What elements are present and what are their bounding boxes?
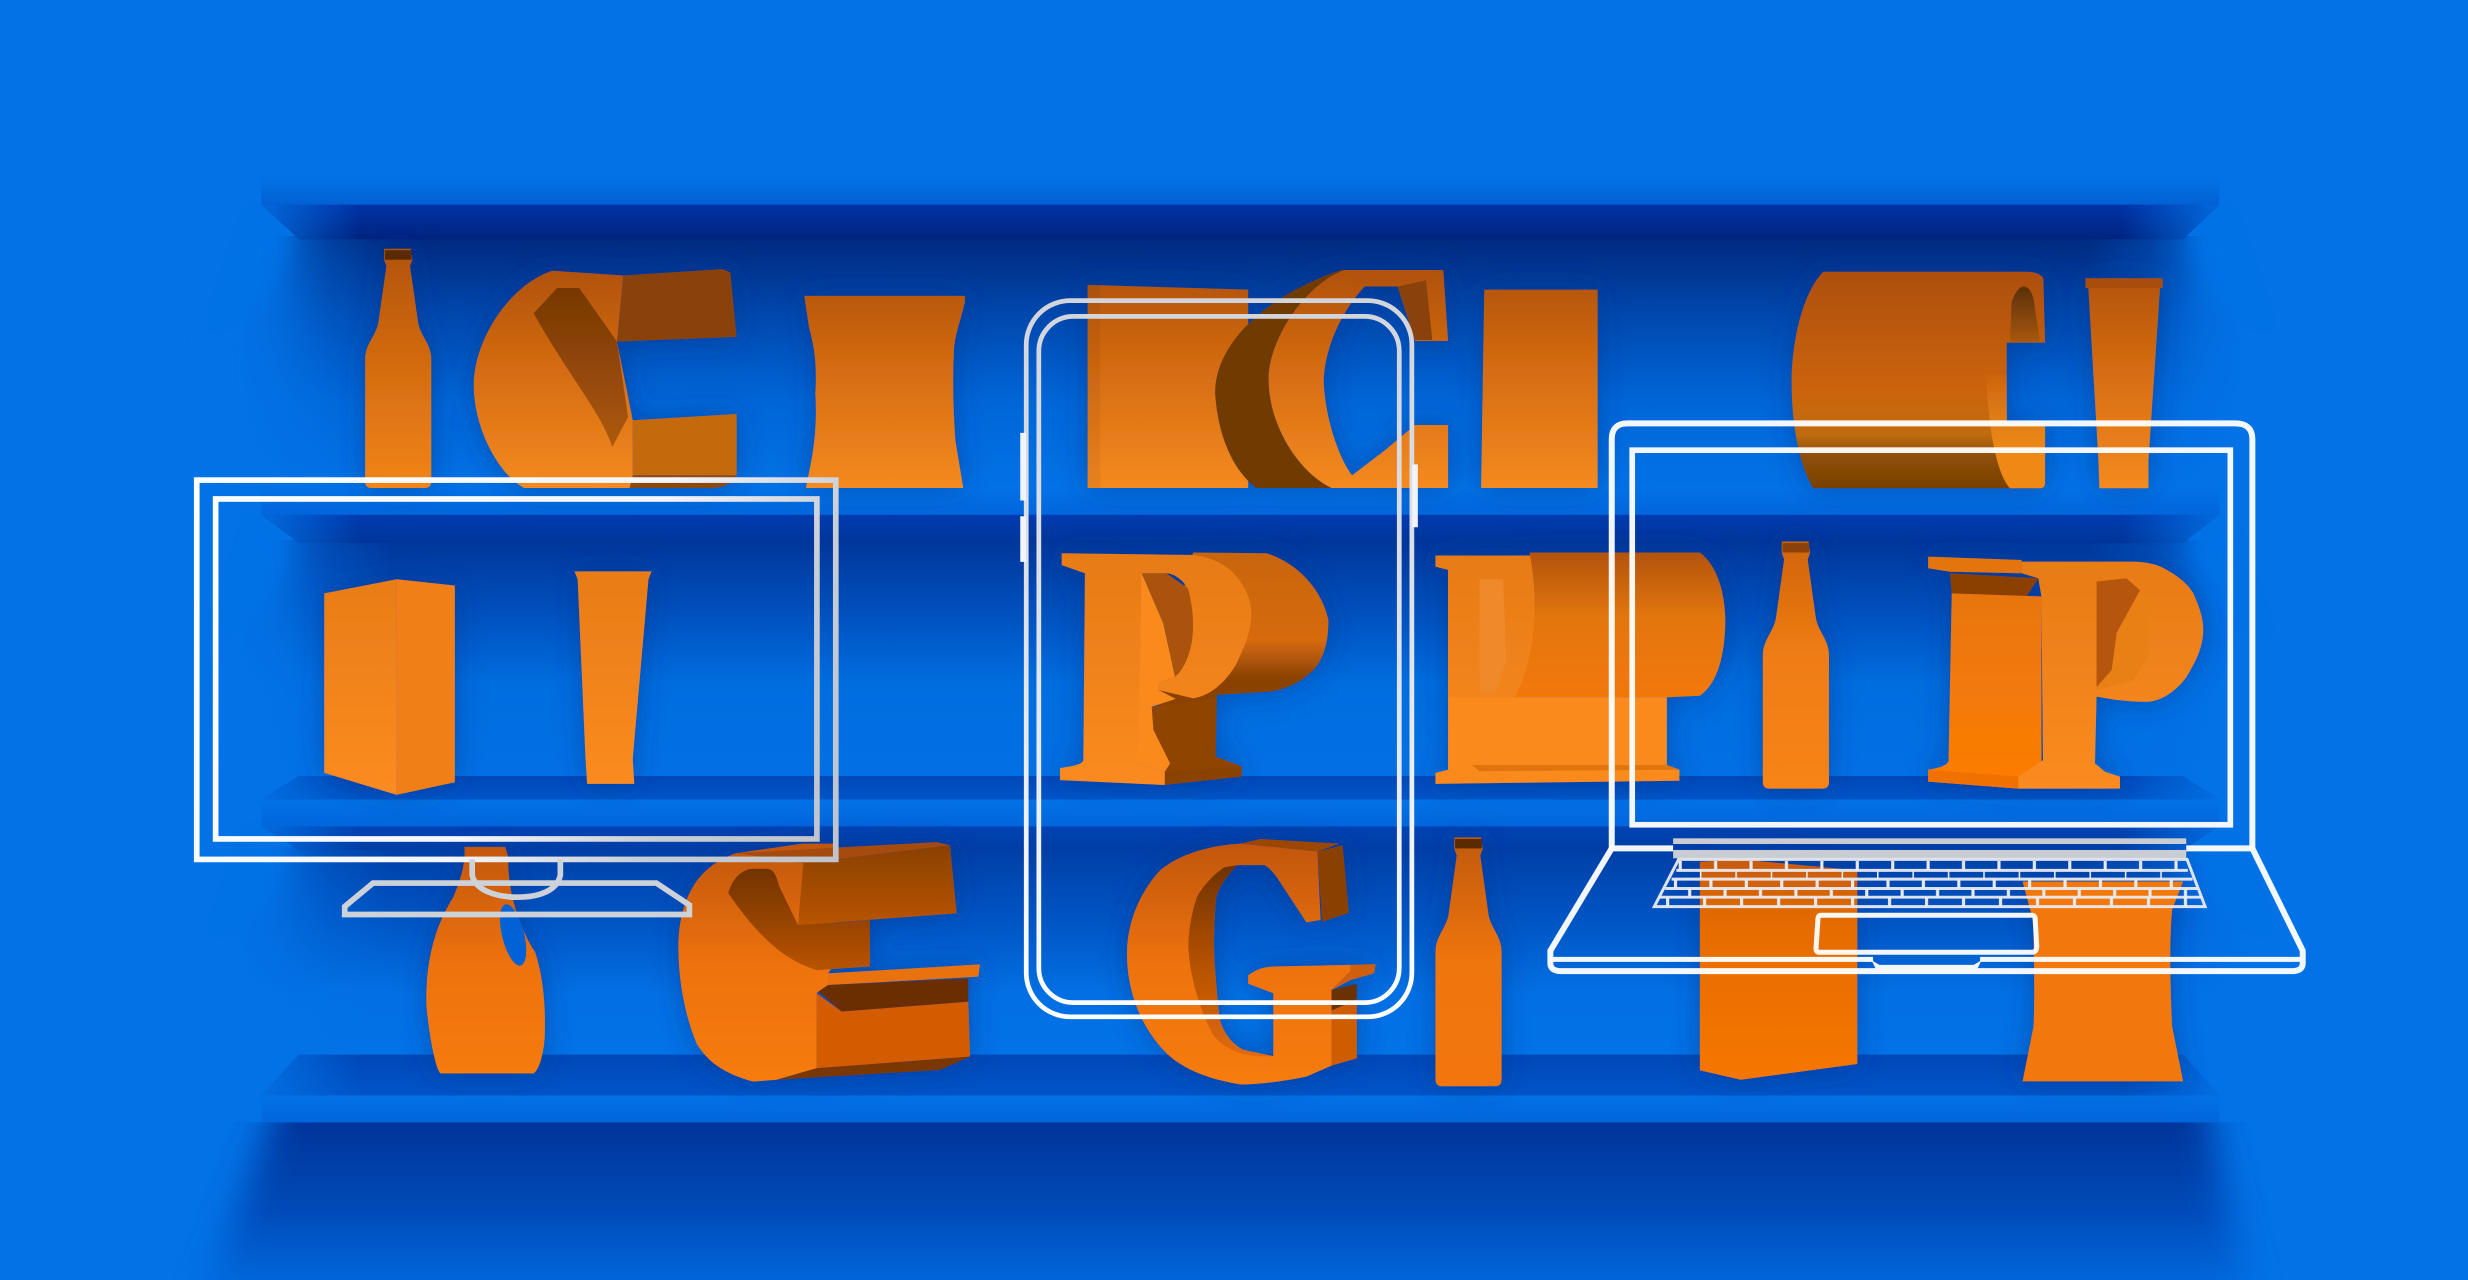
row 2 objects: [324, 541, 2203, 795]
phone body: [1026, 301, 1412, 1017]
phone buttons: [1023, 433, 1415, 562]
box 5: [1700, 859, 1857, 1080]
monitor stand: [345, 859, 689, 915]
snack pouch 2: [2023, 881, 2183, 1081]
letter C 1: [474, 269, 737, 488]
shelf 3 plank and surfaces: [261, 776, 2219, 850]
tube 1: [2085, 278, 2163, 488]
box 3: [1481, 290, 1598, 488]
laptop hinge: [1673, 838, 2186, 858]
letter P 1: [1060, 552, 1328, 785]
phone screen: [1039, 316, 1399, 1003]
shelf unit: [205, 176, 2276, 1280]
back wall: row 3: [236, 847, 2244, 1058]
bottle 1: [365, 249, 431, 488]
tube 2: [575, 571, 652, 784]
row 1 objects: [365, 249, 2163, 488]
letter C 2: [1215, 269, 1448, 488]
shelf 1 plank and underside: [261, 176, 2219, 239]
bottle 3: [1435, 837, 1502, 1086]
letter G: [1127, 839, 1376, 1084]
phone outline: [1023, 301, 1415, 1017]
back wall: row 2: [236, 540, 2244, 779]
monitor outline: [197, 480, 836, 915]
laptop screen: [1632, 450, 2230, 825]
wall edge light: [205, 197, 2276, 1058]
letter C 4: [678, 842, 980, 1082]
laptop keyboard: [1654, 859, 2205, 907]
laptop base: [1550, 848, 2303, 973]
detergent jug: [426, 847, 545, 1073]
monitor screen: [216, 499, 817, 839]
snack pouch 1: [804, 296, 965, 488]
letter C 3: [1792, 272, 2045, 488]
floor shadow below bottom shelf: [212, 1122, 2243, 1280]
monitor frame: [197, 480, 836, 859]
laptop outline: [1550, 423, 2303, 973]
back wall: row 1: [236, 236, 2244, 491]
shelf 4 plank and surface: [261, 1055, 2219, 1122]
bottle 2: [1763, 541, 1829, 789]
letter P 3: [1928, 557, 2203, 789]
laptop lid: [1612, 423, 2252, 850]
letter P 2: [1435, 552, 1725, 784]
box 2: [1088, 285, 1248, 488]
shelf 2 plank and underside: [261, 488, 2219, 543]
laptop touchpad: [1816, 915, 2037, 952]
box 4: [324, 579, 455, 795]
row 3 objects: [426, 837, 2183, 1086]
